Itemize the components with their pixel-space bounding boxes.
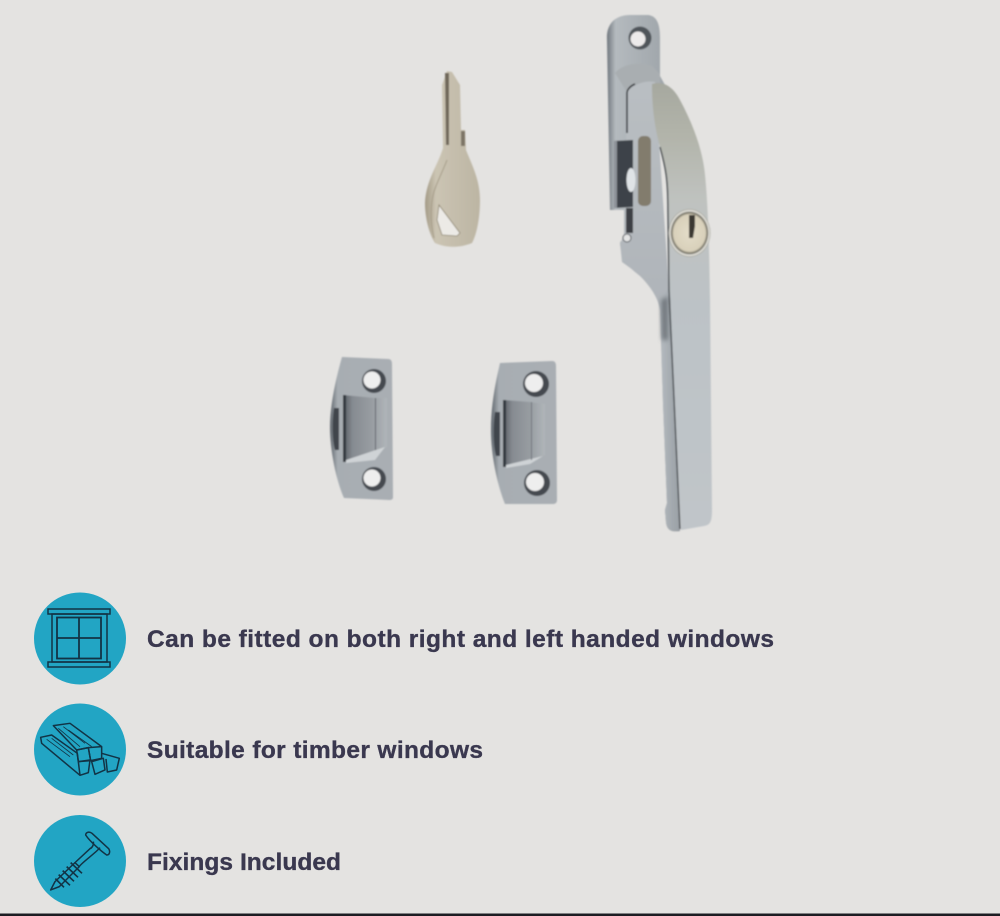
feature text: timber windows: Suitable for timber windows [147,737,483,764]
product: window handle [607,15,712,531]
feature text: fixings included: Fixings Included [147,849,341,876]
feature row: screw icon [34,815,126,907]
feature row: window icon [34,592,126,684]
feature text: right and left handed: Can be fitted on both right and left handed windows [147,626,774,653]
product: left strike plate [330,357,393,500]
product: key [425,71,480,247]
bottom rule [0,914,1000,916]
product: right strike plate [491,361,557,504]
feature row: timber icon [34,704,126,796]
